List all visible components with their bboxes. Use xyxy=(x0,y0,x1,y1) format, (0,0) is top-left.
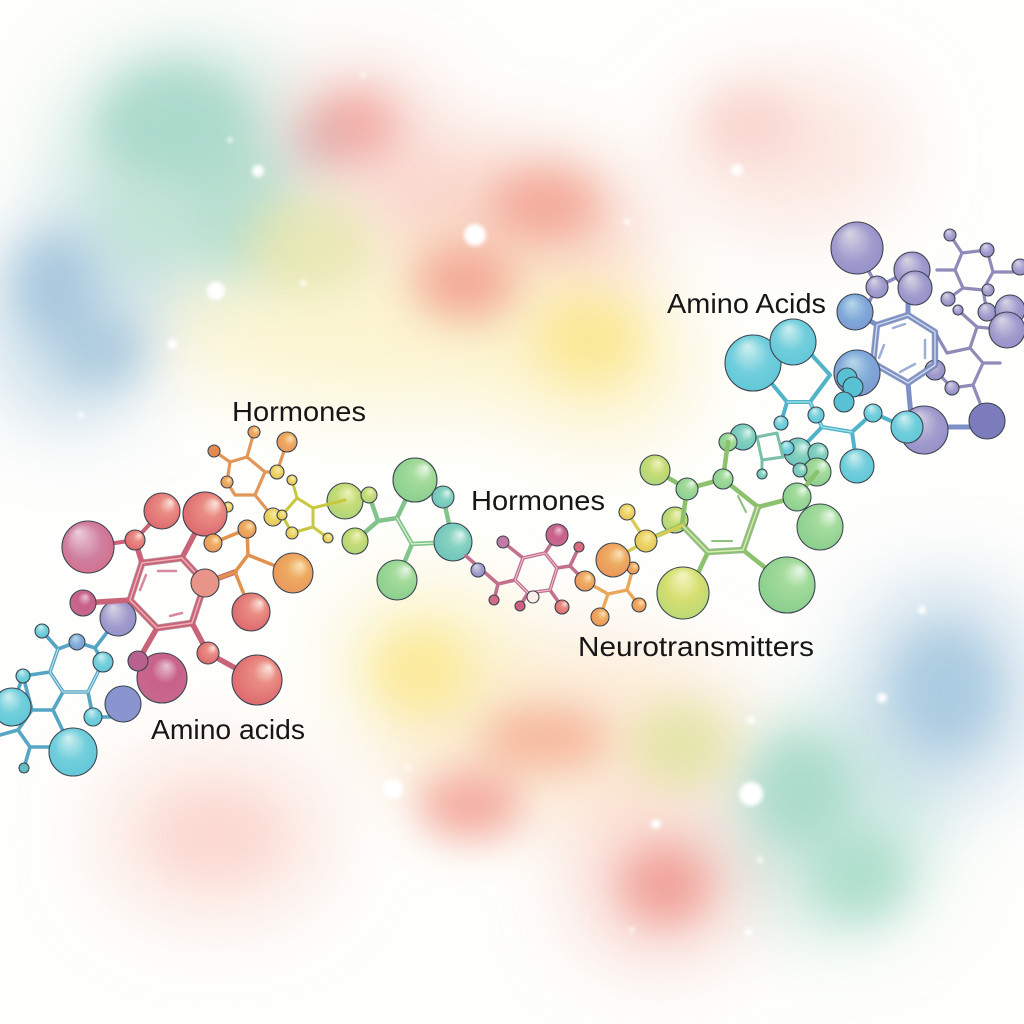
molecule: small pink ring xyxy=(466,524,585,614)
molecule: orange and yellow link xyxy=(575,504,683,626)
molecule: cyan-blue lower left xyxy=(0,600,141,776)
molecule: large red-pink ring xyxy=(62,492,313,705)
label: Neurotransmitters: Neurotransmitters xyxy=(578,631,814,662)
label: Hormones centre: Hormones xyxy=(471,485,605,516)
molecule: green centre xyxy=(327,458,472,600)
molecule: purple far right xyxy=(925,229,1024,421)
molecule: orange-yellow upper left xyxy=(208,426,345,543)
molecule: blue-violet ring xyxy=(831,222,1005,454)
label: Amino Acids upper right: Amino Acids xyxy=(667,288,826,319)
molecule: green upper fragment xyxy=(719,424,831,486)
sparkles xyxy=(78,72,926,936)
molecule: green ring xyxy=(640,442,843,619)
molecule: cyan cluster xyxy=(725,319,923,483)
label: Hormones left: Hormones xyxy=(232,396,366,427)
label: Amino acids lower left: Amino acids xyxy=(151,714,305,745)
